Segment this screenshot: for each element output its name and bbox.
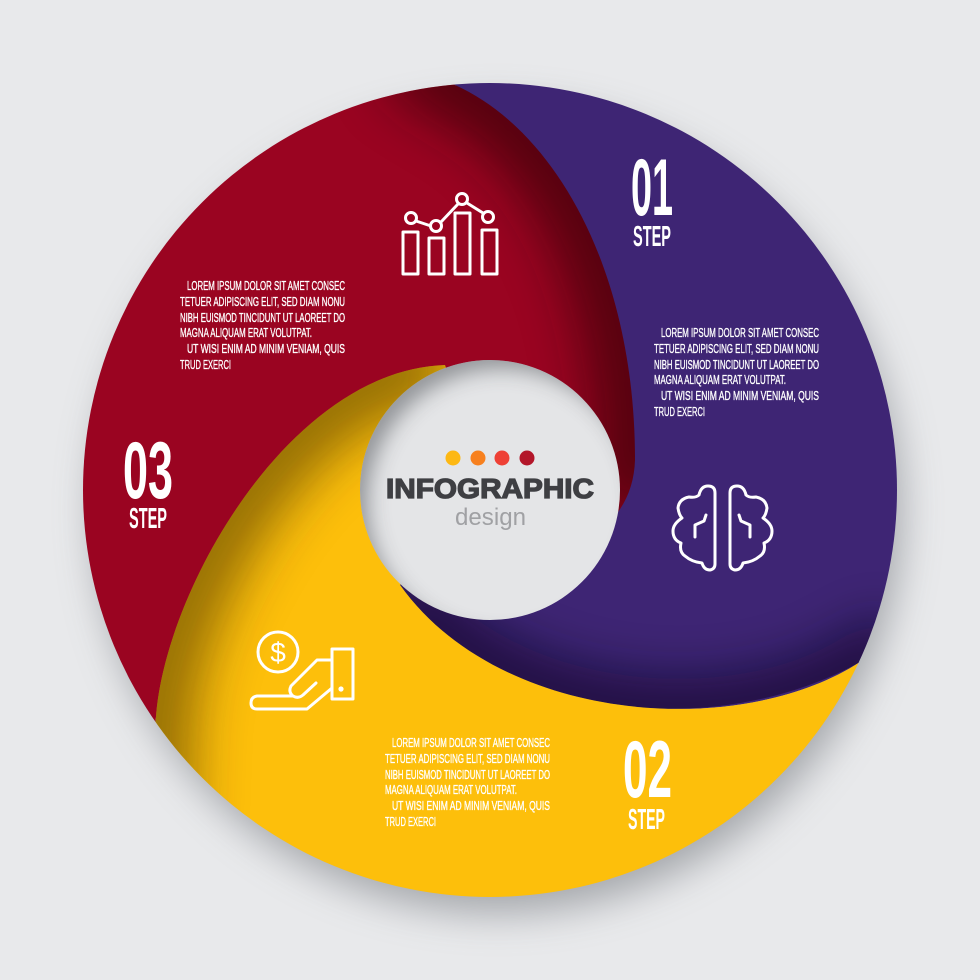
text block: step 1: LOREM IPSUM DOLOR SIT AMET CONSEC	[661, 325, 819, 340]
step 2 label: 02	[623, 725, 672, 815]
step 3 label: STEP	[129, 503, 167, 535]
text block: step 1: TRUD EXERCI	[654, 404, 705, 419]
icon: hand with coin	[251, 632, 353, 709]
text block: step 2: TETUER ADIPISCING ELIT, SED DIAM NONU	[385, 751, 550, 766]
step 3 label: 03	[123, 426, 173, 516]
step 1 label: STEP	[633, 221, 671, 253]
text block: step 3: NIBH EUISMOD TINCIDUNT UT LAOREET DO	[180, 310, 345, 325]
text block: step 3: MAGNA ALIQUAM ERAT VOLUTPAT.	[180, 325, 312, 340]
text block: step 1: MAGNA ALIQUAM ERAT VOLUTPAT.	[654, 372, 786, 387]
step 2 label: STEP	[628, 804, 665, 836]
text block: step 3: TETUER ADIPISCING ELIT, SED DIAM NONU	[180, 294, 345, 309]
text block: step 2	[385, 735, 550, 829]
step 2 label	[623, 725, 672, 836]
step 1 label	[631, 143, 673, 253]
text block: step 3: TRUD EXERCI	[180, 357, 231, 372]
panel: step 3 red segment	[83, 84, 635, 722]
panel: step 1 purple segment	[400, 83, 897, 709]
center hole	[360, 360, 620, 620]
text block: step 2: TRUD EXERCI	[385, 814, 436, 829]
text block: step 1: TETUER ADIPISCING ELIT, SED DIAM NONU	[654, 341, 819, 356]
text block: step 3: LOREM IPSUM DOLOR SIT AMET CONSEC	[187, 278, 345, 293]
subtitle: design	[455, 504, 526, 531]
step 3 label	[123, 426, 173, 535]
center dots	[446, 450, 534, 466]
icon: hand with coin: $	[270, 637, 286, 668]
text block: step 3: UT WISI ENIM AD MINIM VENIAM, QUIS	[187, 341, 345, 356]
text block: step 1	[654, 325, 819, 419]
panel: step 2 yellow segment	[156, 365, 858, 897]
text block: step 2: UT WISI ENIM AD MINIM VENIAM, QUIS	[392, 798, 550, 813]
disc drop shadow	[95, 107, 901, 913]
icon: bar chart	[403, 194, 497, 274]
text block: step 1: NIBH EUISMOD TINCIDUNT UT LAOREET DO	[654, 357, 819, 372]
text block: step 2: MAGNA ALIQUAM ERAT VOLUTPAT.	[385, 782, 517, 797]
text block: step 3	[180, 278, 345, 372]
text block: step 1: UT WISI ENIM AD MINIM VENIAM, QUIS	[661, 388, 819, 403]
text block: step 2: NIBH EUISMOD TINCIDUNT UT LAOREET DO	[385, 767, 550, 782]
text block: step 2: LOREM IPSUM DOLOR SIT AMET CONSEC	[392, 735, 550, 750]
icon: brain	[673, 486, 772, 570]
text: 01	[631, 143, 673, 233]
title: INFOGRAPHIC	[386, 473, 594, 504]
